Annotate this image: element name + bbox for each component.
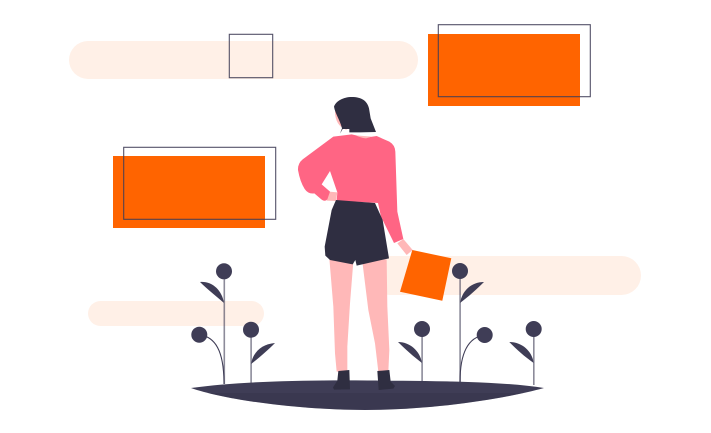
small outlined square [229,34,273,78]
left background pill [88,301,264,326]
skin: face and hands [327,105,413,255]
left orange card [113,147,276,228]
legs [329,258,389,372]
plant: curved stem with flower [460,327,493,382]
top right orange card [428,25,590,106]
person [298,97,413,390]
right background pill [370,256,641,295]
plant group right [398,263,542,385]
ground shadow [190,380,545,411]
plant: curved stem with flower [191,327,224,384]
shoes [333,370,395,390]
shorts [325,200,389,266]
plant: short stem with leaf [243,322,275,383]
plant group left [191,263,275,384]
illustration [69,24,641,410]
neck skin [356,135,372,138]
top background pill [69,41,418,79]
orange paper held in hand [400,250,451,301]
plant: short stem with left leaf [398,321,430,382]
plant: far right stem with leaf [509,321,542,385]
plant: tall stem with right leaf [452,263,484,382]
hair [334,97,376,134]
sweater [298,134,403,243]
plant: tall stem with flower [200,263,232,384]
